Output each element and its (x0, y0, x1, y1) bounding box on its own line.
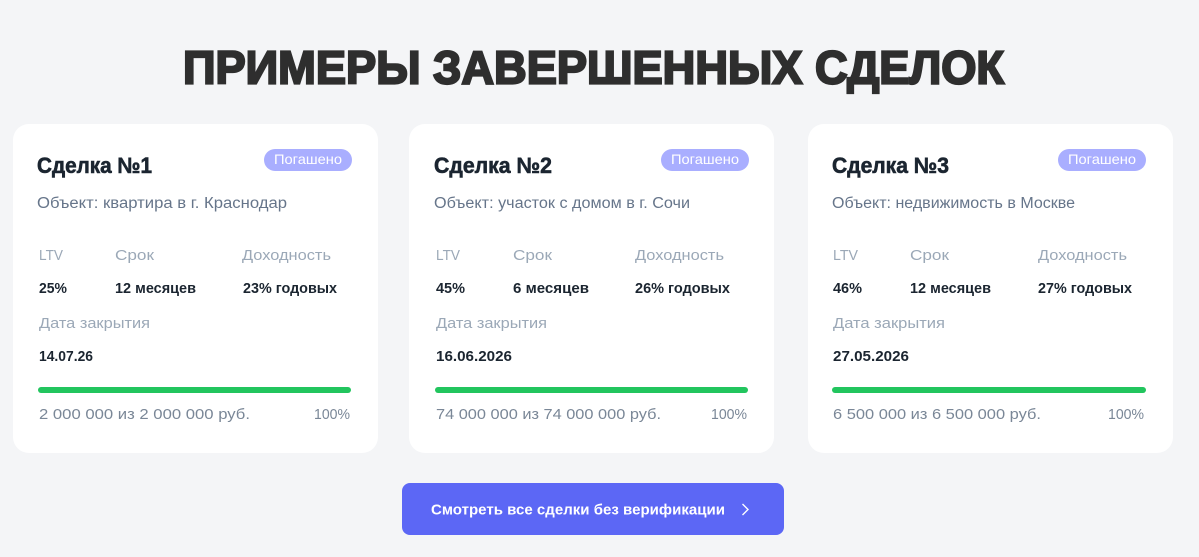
deal 2 LTV: LTV (436, 247, 460, 264)
icon: chevron right (742, 504, 748, 515)
deal 1 object: Объект: квартира в г. Краснодар (37, 195, 287, 212)
deal 2 LTV: 45% (436, 280, 465, 297)
deal 3 LTV: 46% (833, 280, 862, 297)
deal 1 closing date: Дата закрытия (39, 315, 150, 332)
panel: deal 3 (808, 124, 1173, 453)
deal 3 amount: 6 500 000 из 6 500 000 руб. (833, 406, 1041, 423)
deal 1 term: Срок (115, 247, 154, 264)
deal 2 term: Срок (513, 247, 552, 264)
deal 1 yield: Доходность (242, 247, 331, 264)
deal 1 amount: 100% (314, 406, 350, 423)
deal 2 amount: 74 000 000 из 74 000 000 руб. (436, 406, 661, 423)
deal 3 amount: 100% (1108, 406, 1144, 423)
deal 3 yield (1038, 247, 1133, 297)
deal 3 yield: Доходность (1038, 247, 1127, 264)
deal 3 LTV (833, 247, 862, 297)
deal 2 amount (436, 406, 747, 423)
panel: deal 2 (409, 124, 774, 453)
deal 2 closing date: 16.06.2026 (436, 348, 512, 365)
deal 1 amount: 2 000 000 из 2 000 000 руб. (39, 406, 250, 423)
deal 2 closing date: Дата закрытия (436, 315, 547, 332)
button: view all deals (402, 483, 784, 535)
title: ПРИМЕРЫ ЗАВЕРШЕННЫХ СДЕЛОК (183, 42, 1005, 94)
deal 1 yield (242, 247, 338, 297)
deal 2 object: Объект: участок с домом в г. Сочи (434, 195, 690, 212)
deal 1 closing date: 14.07.26 (39, 348, 93, 365)
deal 3 term: Срок (910, 247, 949, 264)
deal 2 heading: Сделка №2 (434, 153, 552, 178)
deal 1 status badge (264, 149, 352, 171)
deal 3 closing date: Дата закрытия (833, 315, 945, 332)
deal 1 LTV: 25% (39, 280, 67, 297)
deal 3 closing date (833, 315, 945, 365)
deal 3 status badge (1058, 149, 1146, 171)
deal 1 yield: 23% годовых (243, 280, 338, 297)
deal 3 status badge: Погашено (1068, 151, 1136, 167)
deal 1 status badge: Погашено (274, 151, 342, 167)
deal 1 amount (39, 406, 350, 423)
deal 2 term (513, 247, 589, 297)
deal 2 amount: 100% (711, 406, 747, 423)
deal 1 LTV (39, 247, 67, 297)
deal 3 LTV: LTV (833, 247, 858, 264)
deal 3 amount (833, 406, 1144, 423)
deal 2 closing date (436, 315, 547, 365)
button: view all deals: Смотреть все сделки без верификации (431, 502, 725, 518)
deal 3 closing date: 27.05.2026 (833, 348, 909, 365)
deal 2 status badge: Погашено (671, 151, 739, 167)
deal 2 progress bar (435, 387, 748, 393)
deal 1 progress bar (38, 387, 351, 393)
deal 2 status badge (661, 149, 749, 171)
deal 3 term: 12 месяцев (910, 280, 991, 297)
deal 1 LTV: LTV (39, 247, 63, 264)
deal 3 heading: Сделка №3 (832, 153, 949, 178)
deal 1 heading: Сделка №1 (37, 153, 152, 178)
deal 1 term: 12 месяцев (115, 280, 196, 297)
deal 2 yield (635, 247, 731, 297)
deal 2 yield: Доходность (635, 247, 724, 264)
deal 1 closing date (39, 315, 150, 365)
deal 1 term (115, 247, 196, 297)
deal 3 progress bar (832, 387, 1146, 393)
deal 3 object: Объект: недвижимость в Москве (832, 195, 1075, 212)
deal 2 term: 6 месяцев (513, 280, 589, 297)
panel: deal 1 (13, 124, 378, 453)
deal 3 term (910, 247, 991, 297)
deal 2 LTV (436, 247, 465, 297)
deal 2 yield: 26% годовых (635, 280, 731, 297)
deal 3 yield: 27% годовых (1038, 280, 1133, 297)
